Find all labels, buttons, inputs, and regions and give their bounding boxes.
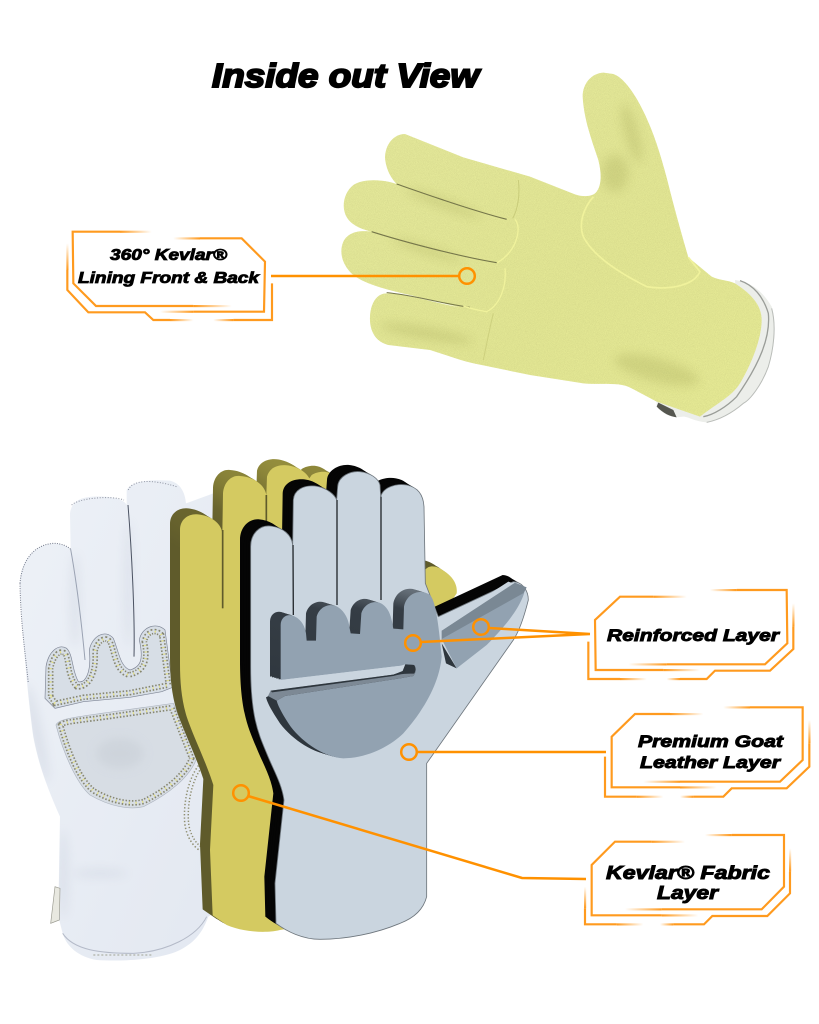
slit <box>270 664 405 691</box>
callout: 360 Kevlar lining: Lining Front & Back <box>78 270 261 287</box>
frame <box>66 231 272 321</box>
suede patch upper <box>45 626 173 708</box>
frame <box>605 706 810 798</box>
white cuff <box>657 280 775 422</box>
callout: kevlar fabric layer: Layer <box>657 883 719 903</box>
leather shading <box>29 578 78 894</box>
cuff tab <box>51 887 60 923</box>
text: Kevlar® Fabric <box>606 863 770 883</box>
finger dividers <box>293 497 381 615</box>
text: Premium Goat <box>638 733 785 751</box>
callout: premium goat leather layer: Leather Layer <box>640 754 782 772</box>
text: 360° Kevlar® <box>110 247 228 264</box>
finger slit <box>220 530 225 608</box>
suede shading <box>97 738 143 768</box>
goat leather layer <box>240 465 528 939</box>
stitching double rows <box>51 632 192 803</box>
side palm stitch <box>186 767 200 848</box>
photo: white goat leather glove <box>20 480 220 961</box>
fabric shading <box>380 103 702 392</box>
reinforced thumb <box>440 582 527 668</box>
leather creases and edge stitches <box>20 482 207 955</box>
leader: reinforced layer <box>405 619 590 651</box>
frame <box>584 834 791 925</box>
callout: 360 Kevlar lining <box>66 231 272 321</box>
reinforced palm <box>266 589 442 758</box>
finger separations and seams <box>372 180 700 360</box>
slit lower bevel <box>268 664 416 701</box>
leather body <box>20 480 220 961</box>
photo: inside-out kevlar glove <box>341 73 775 422</box>
callout: reinforced layer <box>588 589 794 680</box>
text: Reinforced Layer <box>607 627 781 645</box>
reinforced layer <box>266 582 527 758</box>
leather palm patches <box>45 626 197 808</box>
suede patch lower <box>56 703 197 808</box>
leader: kevlar fabric layer <box>233 785 586 879</box>
leader: kevlar lining <box>271 268 475 284</box>
frame <box>588 589 794 680</box>
leader: goat leather layer <box>401 744 606 760</box>
callout: premium goat leather layer <box>605 706 810 798</box>
title: Inside out View <box>212 57 482 94</box>
glove body <box>341 73 762 417</box>
layered diagram: exploded glove layers <box>170 459 528 939</box>
callout: kevlar fabric layer <box>584 834 791 925</box>
kevlar fabric layer <box>170 459 457 932</box>
